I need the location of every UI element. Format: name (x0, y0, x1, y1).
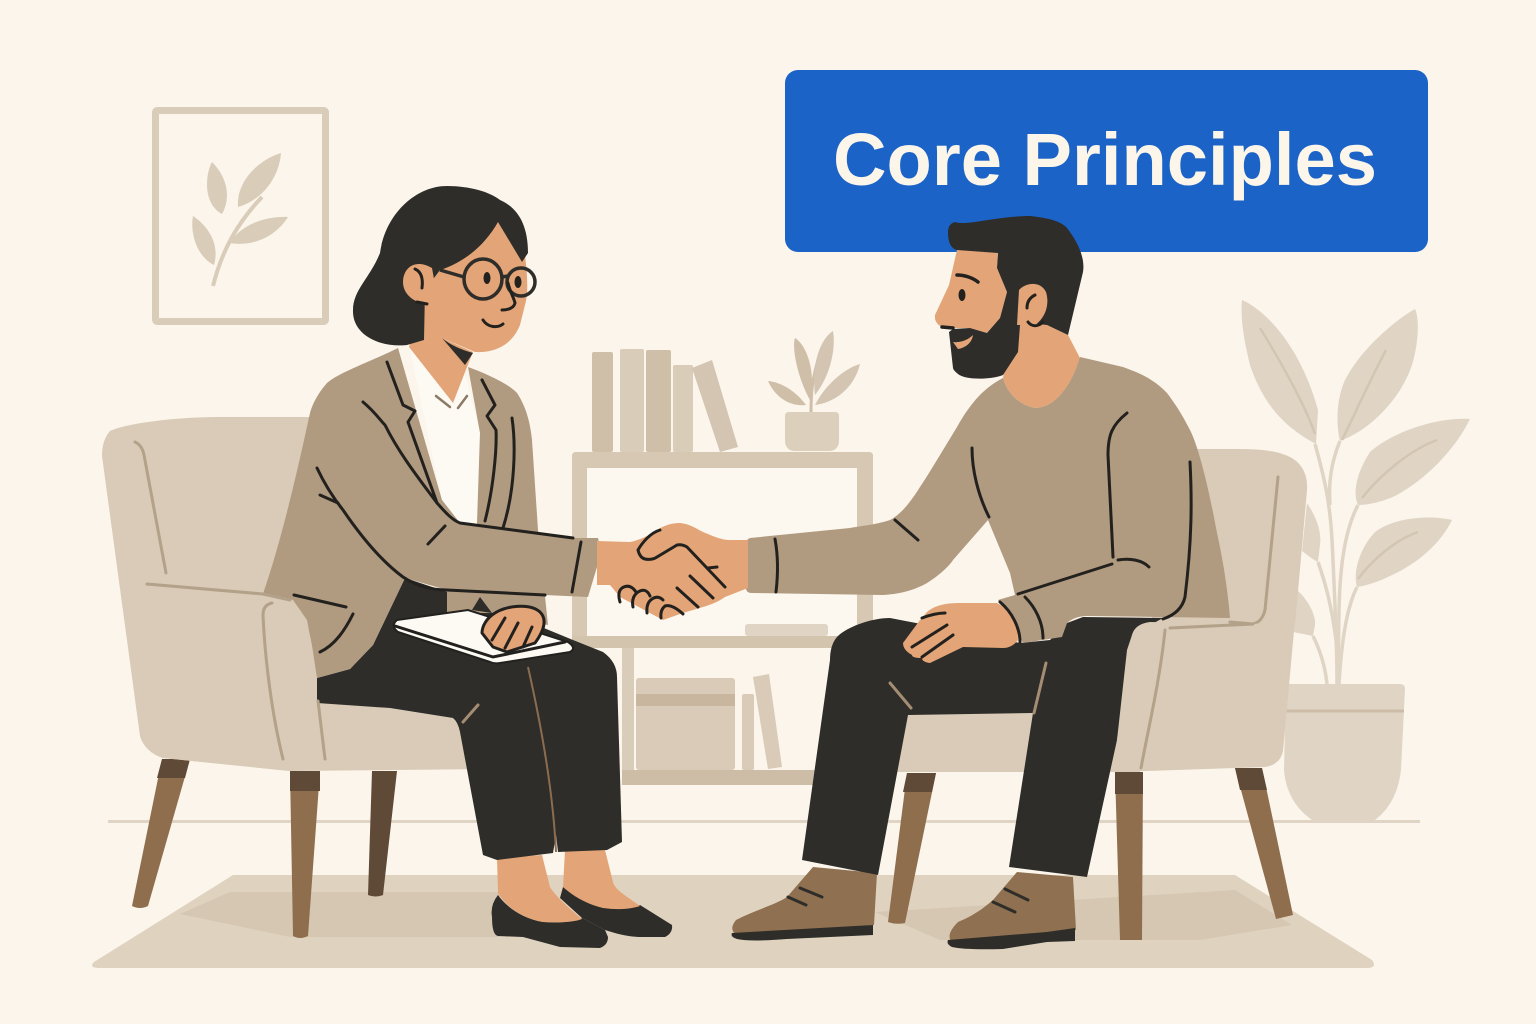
man's mouth (953, 335, 973, 349)
man's trousers (802, 617, 1163, 877)
left armchair back and seat (102, 417, 490, 938)
man's resting hand (903, 602, 1020, 663)
title text: Core Principles (833, 118, 1377, 201)
sweater fold lines (775, 413, 1191, 638)
glasses (440, 259, 535, 299)
face (420, 215, 527, 352)
woman: counselor (263, 186, 672, 948)
woman's resting hand (482, 606, 544, 652)
hair (353, 186, 528, 345)
right armchair front arm (1115, 620, 1295, 772)
blouse (410, 350, 480, 530)
man's neck (1003, 300, 1080, 408)
tablet (394, 610, 573, 663)
jacket (263, 348, 600, 678)
title banner (785, 70, 1428, 252)
rug (92, 875, 1374, 968)
bookshelf (572, 331, 873, 785)
clasped hands (597, 523, 748, 620)
man's hair and beard (948, 216, 1083, 379)
man's shoes (732, 867, 1076, 949)
face details (483, 272, 522, 327)
neck (409, 300, 473, 403)
books and box (592, 349, 782, 770)
left armchair front arm (140, 584, 325, 771)
woman's feet and shoes (492, 850, 672, 948)
man's face (935, 250, 1007, 333)
man: client (597, 216, 1230, 949)
man's face details (942, 275, 978, 328)
small potted plant (768, 331, 860, 451)
large potted plant (1242, 300, 1470, 820)
ear (403, 264, 436, 304)
right armchair back and seat (888, 449, 1307, 940)
woman's trousers (317, 578, 622, 860)
floor line (108, 820, 1420, 823)
sweater (746, 357, 1230, 643)
man's ear (1017, 284, 1047, 326)
framed plant picture (156, 110, 326, 322)
